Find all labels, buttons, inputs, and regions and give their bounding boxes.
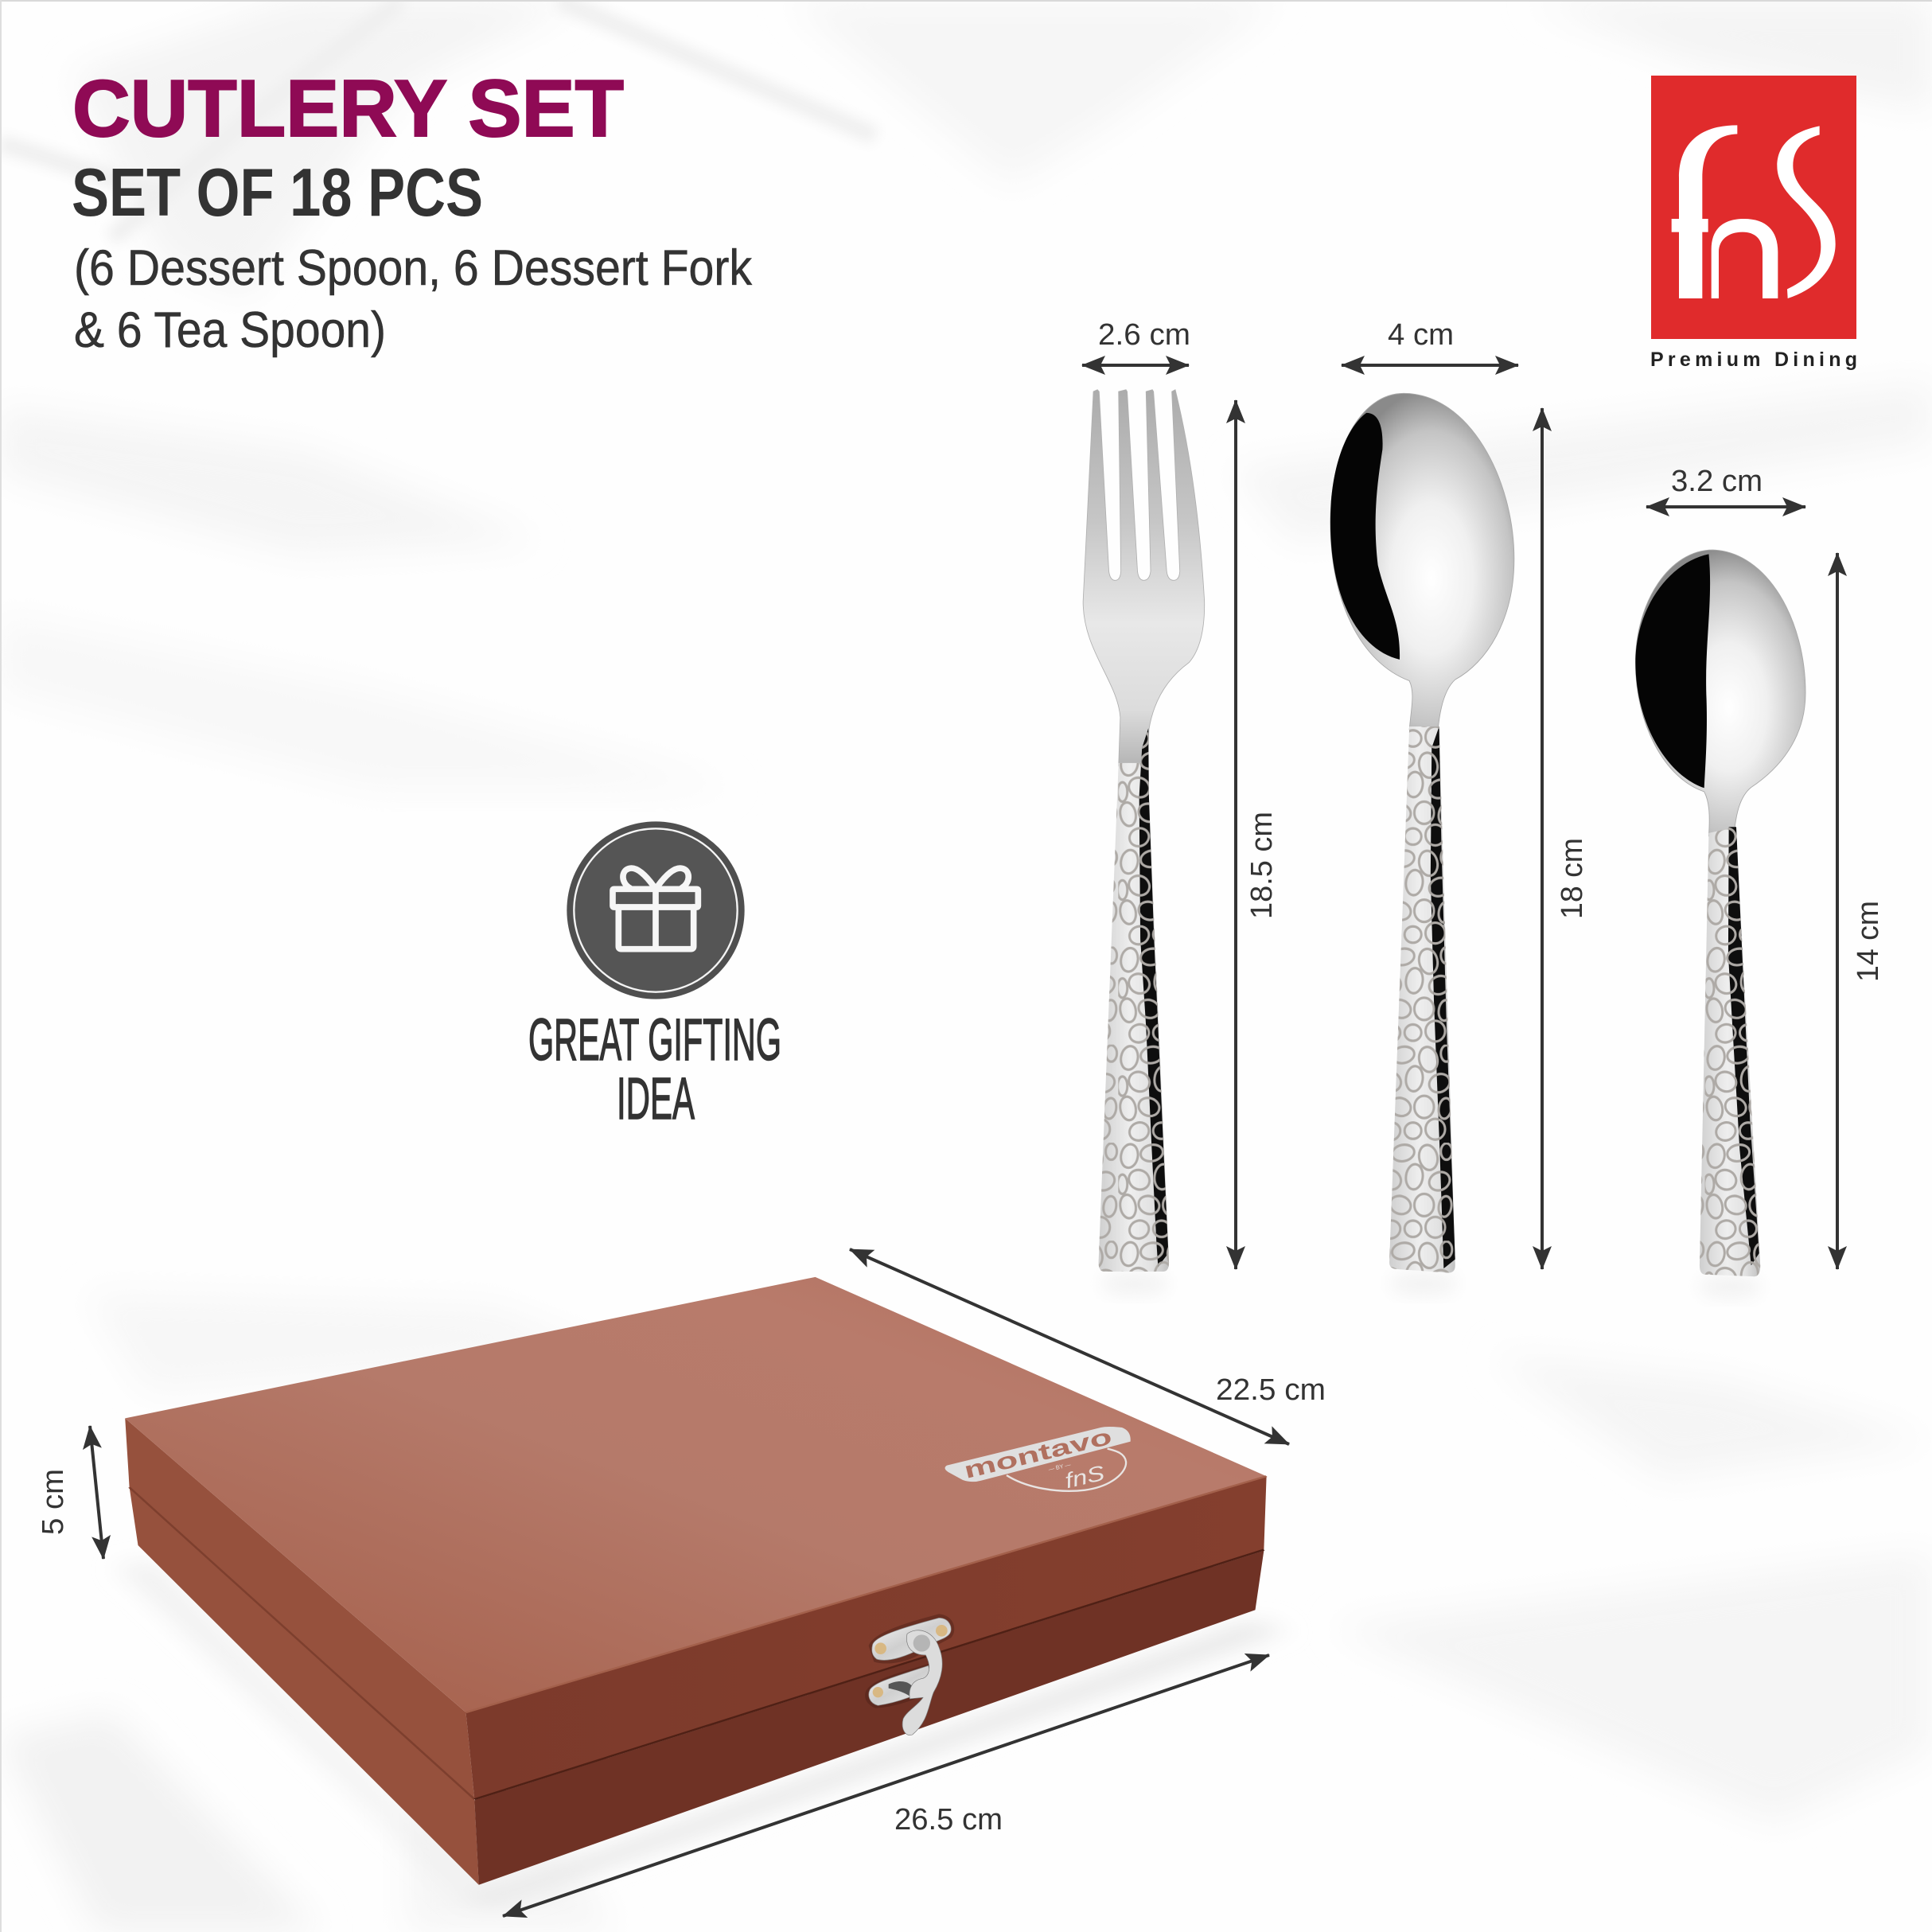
dimension: tea spoon length: 14 cm xyxy=(1852,901,1885,982)
description: & 6 Tea Spoon) xyxy=(74,302,386,358)
tea spoon handle xyxy=(1700,827,1760,1276)
dimension: tea spoon width: 3.2 cm xyxy=(1671,465,1763,498)
title: CUTLERY SET xyxy=(72,64,624,154)
gift box xyxy=(125,1277,1277,1911)
box left side xyxy=(125,1418,479,1885)
tea spoon bowl dark reflection xyxy=(1635,554,1710,788)
subtitle: SET OF 18 PCS xyxy=(72,155,483,231)
dimension: fork width xyxy=(1082,318,1190,365)
dimension: dessert spoon width: 4 cm xyxy=(1388,318,1454,352)
dimension: box width xyxy=(503,1655,1269,1916)
spoon handle reflection xyxy=(1431,726,1455,1268)
gift label xyxy=(528,1007,781,1132)
dessert spoon xyxy=(1330,393,1514,1296)
tea spoon xyxy=(1635,550,1805,1299)
dimension: box depth xyxy=(850,1249,1326,1444)
box front upper xyxy=(465,1476,1267,1799)
tea spoon handle reflection xyxy=(1728,827,1759,1265)
spoon bowl dark reflection xyxy=(1330,413,1400,660)
tea spoon bowl xyxy=(1635,550,1805,836)
gift label: IDEA xyxy=(617,1065,695,1132)
fork handle reflection xyxy=(1139,728,1168,1267)
dimension: dessert spoon length: 18 cm xyxy=(1556,838,1589,919)
brand mark: montavo: — BY — xyxy=(1048,1461,1072,1473)
fork xyxy=(1083,390,1205,1296)
fork handle xyxy=(1099,763,1169,1272)
gift badge xyxy=(567,821,745,999)
icon: gift xyxy=(567,821,745,999)
logo: fnS Premium Dining xyxy=(1650,76,1857,371)
gift label: GREAT GIFTING xyxy=(528,1007,781,1073)
dimension: box height xyxy=(37,1426,103,1559)
description: (6 Dessert Spoon, 6 Dessert Fork xyxy=(74,240,752,296)
clasp xyxy=(865,1614,954,1735)
dimension: fork length: 18.5 cm xyxy=(1245,812,1279,919)
box front lower xyxy=(474,1551,1264,1885)
brand mark: montavo xyxy=(945,1424,1131,1493)
spoon handle xyxy=(1389,726,1455,1273)
brand mark: montavo: montavo xyxy=(961,1424,1115,1484)
box lid top xyxy=(125,1277,1267,1712)
spoon reflection xyxy=(1389,1272,1458,1296)
tea spoon reflection xyxy=(1699,1275,1762,1299)
dimension: box depth: 22.5 cm xyxy=(1216,1373,1326,1407)
logo: fnS Premium Dining: Premium Dining xyxy=(1650,349,1857,371)
spoon bowl xyxy=(1330,393,1514,730)
dimension: box height: 5 cm xyxy=(37,1469,70,1535)
dimension: box width: 26.5 cm xyxy=(894,1803,1003,1837)
fork head xyxy=(1083,390,1205,766)
brand mark: montavo: fnS xyxy=(1062,1461,1107,1493)
dimension: fork width: 2.6 cm xyxy=(1098,318,1190,352)
fork reflection xyxy=(1100,1272,1169,1296)
description xyxy=(74,240,752,358)
box shadow xyxy=(130,1554,1277,1911)
